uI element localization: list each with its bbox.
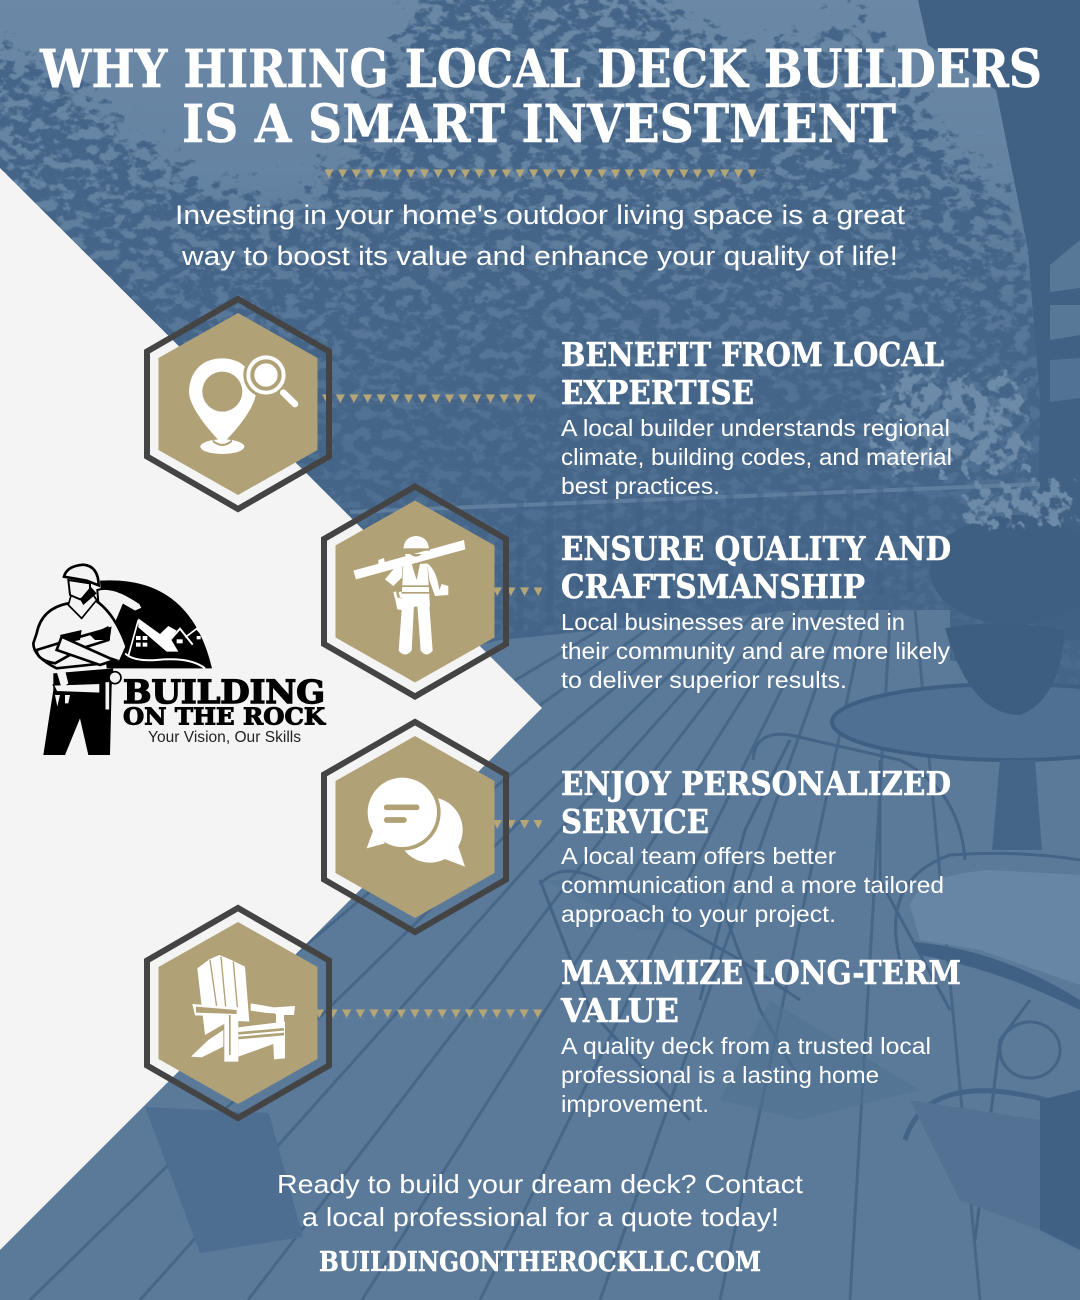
call to action — [277, 1169, 804, 1232]
heading and text: quality and craftsmanship — [561, 529, 951, 693]
title — [39, 39, 1042, 155]
heading and text: local expertise: EXPERTISE — [561, 373, 754, 412]
connector: row 1 — [322, 394, 536, 403]
heading and text: long-term value: improvement. — [561, 1091, 709, 1117]
heading and text: local expertise: best practices. — [561, 473, 720, 499]
website url: BUILDINGONTHEROCKLLC.COM — [319, 1247, 761, 1278]
logo: Building on the Rock — [33, 565, 326, 755]
heading and text: personalized service: communication and a more tailored — [561, 872, 944, 898]
heading and text: long-term value: VALUE — [560, 991, 679, 1030]
heading and text: local expertise — [561, 335, 952, 499]
logo wordmark: BUILDING — [123, 673, 325, 711]
call to action: Ready to build your dream deck? Contact — [277, 1169, 804, 1199]
heading and text: quality and craftsmanship: ENSURE QUALITY AND — [561, 529, 951, 568]
logo tagline: Your Vision, Our Skills — [148, 729, 301, 746]
logo emblem: builder and dome — [33, 565, 212, 755]
heading and text: personalized service: A local team offers better — [561, 843, 836, 869]
hexagon 1: local expertise — [147, 299, 329, 509]
heading and text: personalized service: SERVICE — [561, 802, 709, 841]
hexagon 3: personalized service — [324, 722, 506, 932]
connector: row 4 — [315, 1009, 542, 1018]
heading and text: long-term value: MAXIMIZE LONG-TERM — [561, 953, 961, 992]
logo: Building on the Rock: ON THE ROCK — [123, 704, 326, 730]
heading and text: local expertise: climate, building codes, and material — [561, 444, 952, 470]
heading and text: personalized service — [561, 764, 951, 927]
icon: adirondack chair — [191, 955, 295, 1062]
heading and text: quality and craftsmanship: their community and are more likely — [561, 638, 950, 664]
connector: row 3 — [493, 820, 542, 829]
hexagon 2: quality and craftsmanship — [324, 486, 506, 696]
title divider: triangles — [324, 169, 756, 178]
icon: chat bubbles — [364, 774, 465, 867]
heading and text: quality and craftsmanship: to deliver superior results. — [561, 667, 847, 693]
hexagon 4: long-term value — [147, 908, 329, 1118]
heading and text: long-term value: professional is a lasting home — [561, 1062, 879, 1088]
intro text: Investing in your home's outdoor living space is a great — [175, 200, 906, 230]
intro text: way to boost its value and enhance your quality of life! — [181, 241, 898, 271]
call to action: a local professional for a quote today! — [302, 1202, 779, 1232]
icon: map pin with magnifier — [189, 352, 295, 454]
heading and text: quality and craftsmanship: CRAFTSMANSHIP — [561, 567, 865, 606]
heading and text: local expertise: BENEFIT FROM LOCAL — [561, 335, 944, 374]
heading and text: long-term value: A quality deck from a trusted local — [561, 1033, 931, 1059]
intro text — [175, 200, 906, 271]
heading and text: local expertise: A local builder understands regional — [561, 415, 950, 441]
connector: row 2 — [493, 587, 542, 596]
heading and text: long-term value — [560, 953, 961, 1117]
white diagonal panel — [0, 168, 542, 1250]
heading and text: personalized service: approach to your project. — [561, 901, 836, 927]
title: IS A SMART INVESTMENT — [182, 94, 896, 155]
heading and text: personalized service: ENJOY PERSONALIZED — [561, 764, 951, 803]
icon: worker carrying a beam — [353, 536, 465, 654]
heading and text: quality and craftsmanship: Local businesses are invested in — [561, 609, 905, 635]
